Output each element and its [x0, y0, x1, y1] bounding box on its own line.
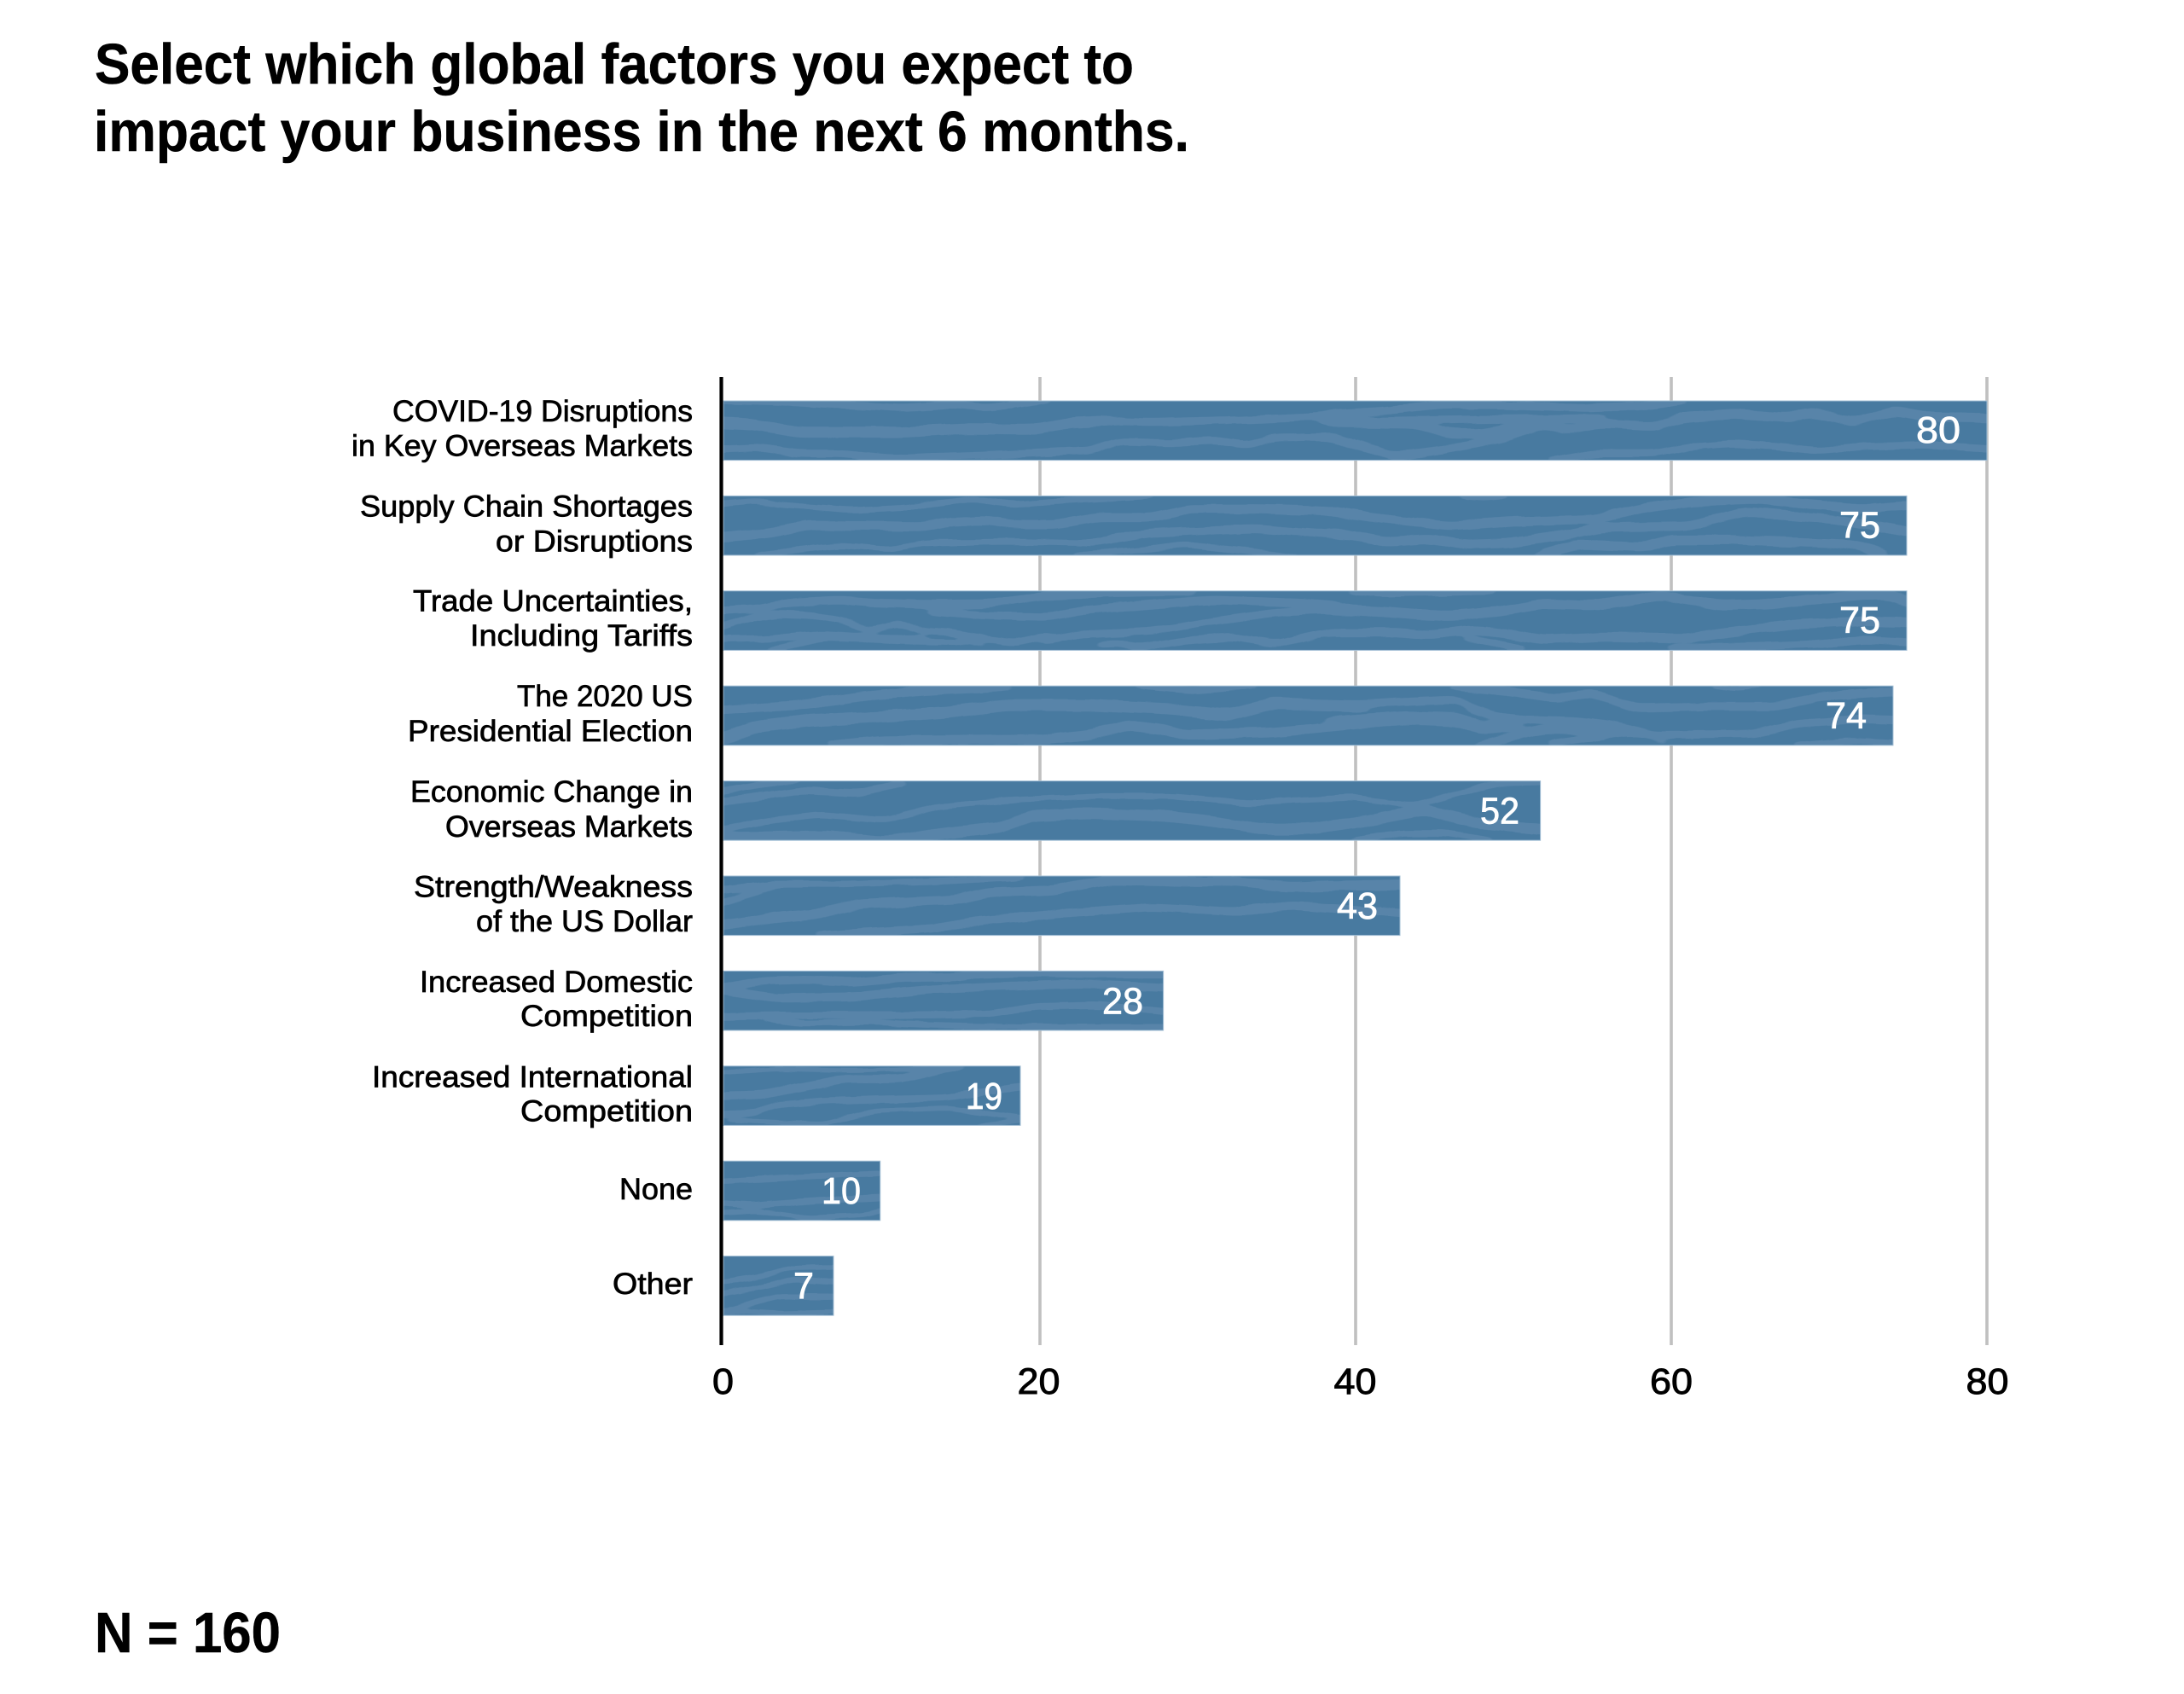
category labels: in Key Overseas Markets [351, 430, 693, 462]
bar: Trade Uncertainties, 75: 75 [1839, 600, 1880, 641]
bar: COVID-19 Disruptions, 80: 80 [1916, 409, 1960, 451]
x axis labels [712, 1361, 2008, 1402]
category labels: Competition [520, 1000, 693, 1033]
bar: Other, 7: 7 [793, 1266, 814, 1308]
x axis labels: 60 [1650, 1361, 1693, 1402]
x axis labels: 40 [1334, 1361, 1377, 1402]
category labels: Supply Chain Shortages [360, 490, 693, 524]
x axis labels: 20 [1017, 1361, 1060, 1402]
vertical axis line [719, 377, 723, 1345]
category labels: Strength/Weakness [414, 870, 693, 904]
x axis labels: 0 [712, 1361, 734, 1402]
category labels: Overseas Markets [445, 810, 693, 844]
title: Select which global factors you expect to [95, 32, 1134, 96]
bar: None, 10 [717, 1161, 887, 1221]
bar: Trade Uncertainties, 75 [708, 591, 1916, 650]
bar: COVID-19 Disruptions, 80 [708, 399, 1997, 461]
bar: Supply Chain Shortages, 75: 75 [1839, 505, 1880, 547]
x axis labels: 80 [1966, 1361, 2008, 1402]
title [94, 32, 1189, 164]
category labels: Increased International [372, 1061, 693, 1094]
category labels: Economic Change in [410, 775, 693, 809]
bar: The 2020 US Presidential Election, 74: 74 [1826, 695, 1867, 737]
grid lines [1040, 377, 1987, 1345]
sample size note: N = 160 [95, 1601, 281, 1665]
bar: None, 10: 10 [822, 1170, 861, 1212]
category labels: or Disruptions [496, 525, 693, 558]
category labels: Other [613, 1268, 693, 1301]
bar: Economic Change in Overseas Markets, 52 [712, 780, 1549, 842]
category labels: Including Tariffs [470, 619, 693, 653]
category labels: Presidential Election [408, 715, 693, 748]
bar: Increased Domestic Competition, 28 [713, 971, 1170, 1030]
bar chart [351, 377, 2008, 1402]
category labels: None [619, 1173, 693, 1206]
bar: Increased International Competition, 19 [713, 1066, 1027, 1126]
category labels [351, 395, 693, 1301]
bar: Strength/Weakness of the US Dollar, 43: 43 [1337, 885, 1378, 927]
bar: Increased Domestic Competition, 28: 28 [1102, 980, 1143, 1022]
category labels: Increased Domestic [420, 966, 693, 999]
bar: Economic Change in Overseas Markets, 52: 52 [1480, 791, 1519, 832]
category labels: COVID-19 Disruptions [392, 395, 693, 428]
bar: The 2020 US Presidential Election, 74 [708, 686, 1903, 745]
category labels: Competition [520, 1095, 693, 1128]
title: impact your business in the next 6 months. [94, 100, 1189, 164]
category labels: Trade Uncertainties, [413, 585, 693, 618]
bar: Increased International Competition, 19: 19 [966, 1076, 1002, 1117]
category labels: of the US Dollar [476, 905, 693, 938]
category labels: The 2020 US [517, 680, 693, 713]
bar: Strength/Weakness of the US Dollar, 43 [712, 876, 1413, 936]
bar: Supply Chain Shortages, 75 [708, 496, 1916, 557]
bar: Other, 7 [717, 1256, 839, 1315]
